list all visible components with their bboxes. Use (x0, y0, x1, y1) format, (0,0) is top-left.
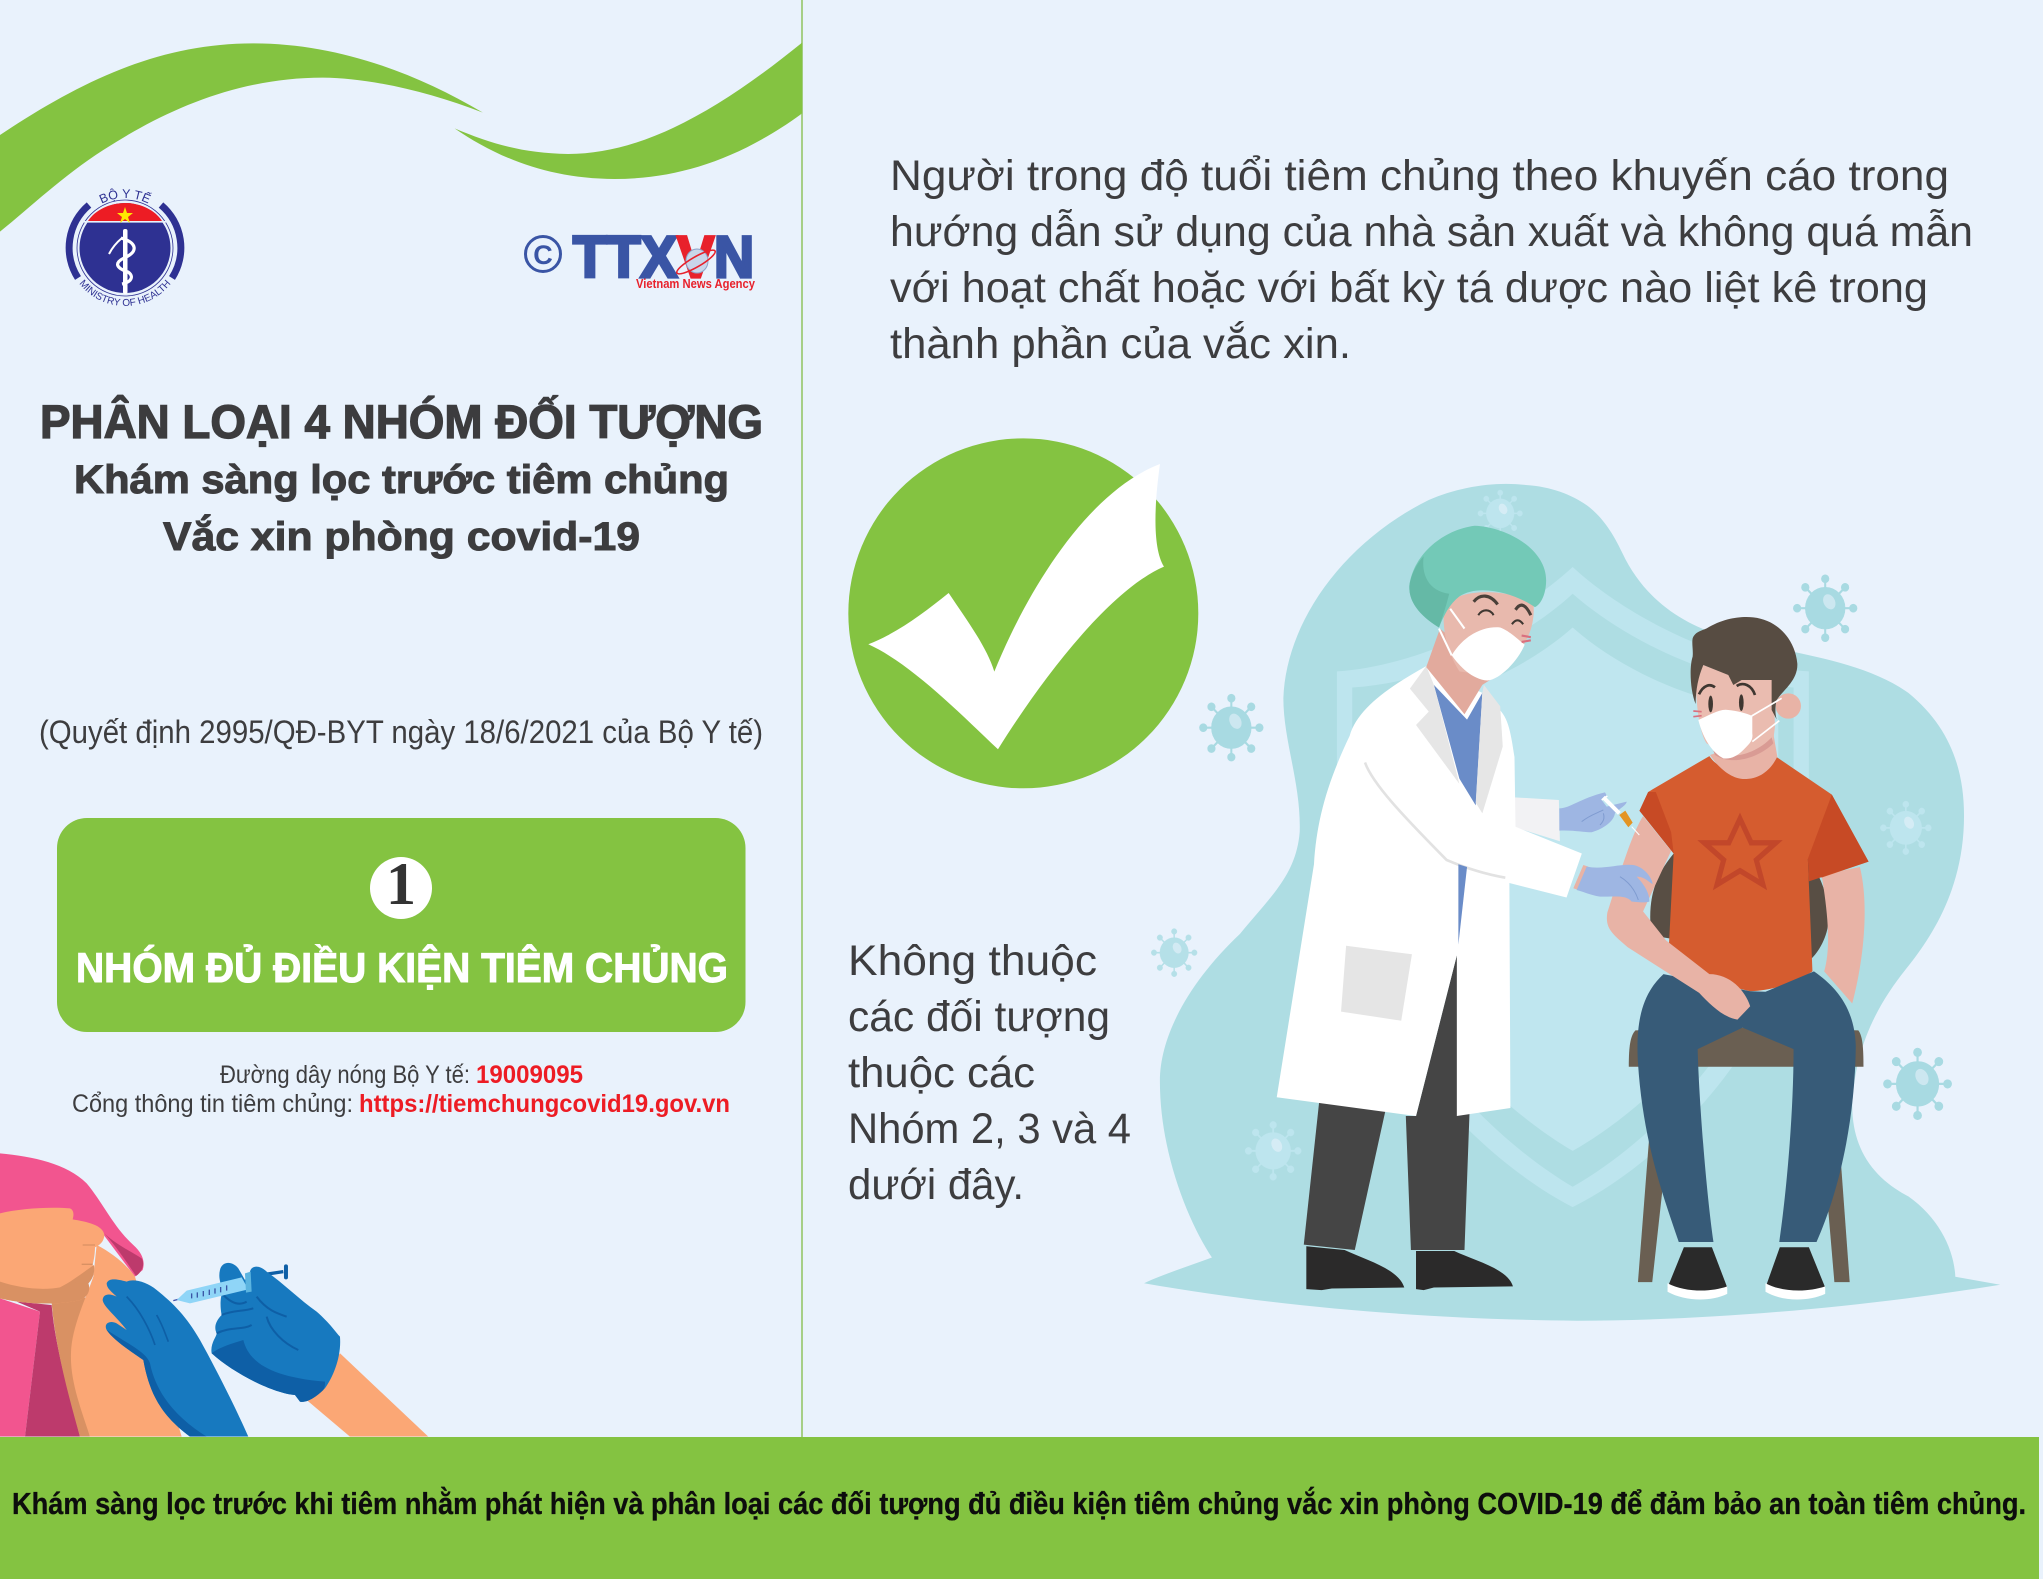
note text: thuộc các (848, 1049, 1035, 1097)
decision reference: (Quyết định 2995/QĐ-BYT ngày 18/6/2021 của Bộ Y tế) (39, 714, 763, 750)
illustration: doctor vaccinating patient (1144, 484, 2000, 1321)
hotline info: 19009095 (476, 1061, 583, 1089)
logo: TTXVN: Vietnam News Agency (636, 277, 755, 291)
blob backdrop (1144, 484, 2000, 1321)
icon: check mark circle (848, 438, 1198, 788)
title: Vắc xin phòng covid-19 (163, 513, 640, 559)
chair (1629, 854, 1863, 1282)
note text: dưới đây. (848, 1161, 1024, 1209)
doctor (1277, 526, 1582, 1290)
intro paragraph: với hoạt chất hoặc với bất kỳ tá dược nào liệt kê trong (890, 264, 1928, 312)
intro paragraph: thành phần của vắc xin. (890, 320, 1351, 368)
green decorative wave (0, 43, 802, 232)
intro paragraph: hướng dẫn sử dụng của nhà sản xuất và không quá mẫn (890, 208, 1973, 256)
logo: TTXVN: C (533, 240, 553, 270)
title: PHÂN LOẠI 4 NHÓM ĐỐI TƯỢNG (40, 395, 763, 448)
logo: Ministry of Health (66, 188, 184, 306)
vertical divider (801, 0, 803, 1437)
shield backdrop (1337, 567, 1809, 1207)
illustration: arm vaccination (0, 1153, 428, 1437)
logo: TTXVN: TTXVN (573, 225, 754, 290)
patient head and doctor gloves (1559, 617, 1801, 902)
group 1 badge panel (57, 818, 746, 1032)
note text: các đối tượng (848, 993, 1110, 1041)
logo: Ministry of Health: MINISTRY OF HEALTH (80, 280, 170, 306)
patient body (1607, 756, 1869, 1300)
hotline info (72, 1061, 730, 1118)
hotline info: Cổng thông tin tiêm chủng: (72, 1090, 353, 1118)
group 1 badge panel: NHÓM ĐỦ ĐIỀU KIỆN TIÊM CHỦNG (76, 943, 728, 991)
logo: Ministry of Health: BỘ Y TẾ (99, 188, 152, 204)
note text: Không thuộc (848, 937, 1097, 985)
title (40, 395, 763, 559)
hotline info: https://tiemchungcovid19.gov.vn (359, 1090, 730, 1118)
note text: Nhóm 2, 3 và 4 (848, 1105, 1131, 1153)
title: Khám sàng lọc trước tiêm chủng (74, 458, 729, 502)
group 1 badge panel: 1 (386, 851, 416, 917)
hotline info: Đường dây nóng Bộ Y tế: (220, 1061, 470, 1089)
intro paragraph: Người trong độ tuổi tiêm chủng theo khuyến cáo trong (890, 152, 1949, 200)
note text (848, 937, 1131, 1209)
intro paragraph (890, 152, 1973, 368)
bottom banner (0, 1437, 2039, 1579)
virus icons (1151, 490, 1952, 1180)
